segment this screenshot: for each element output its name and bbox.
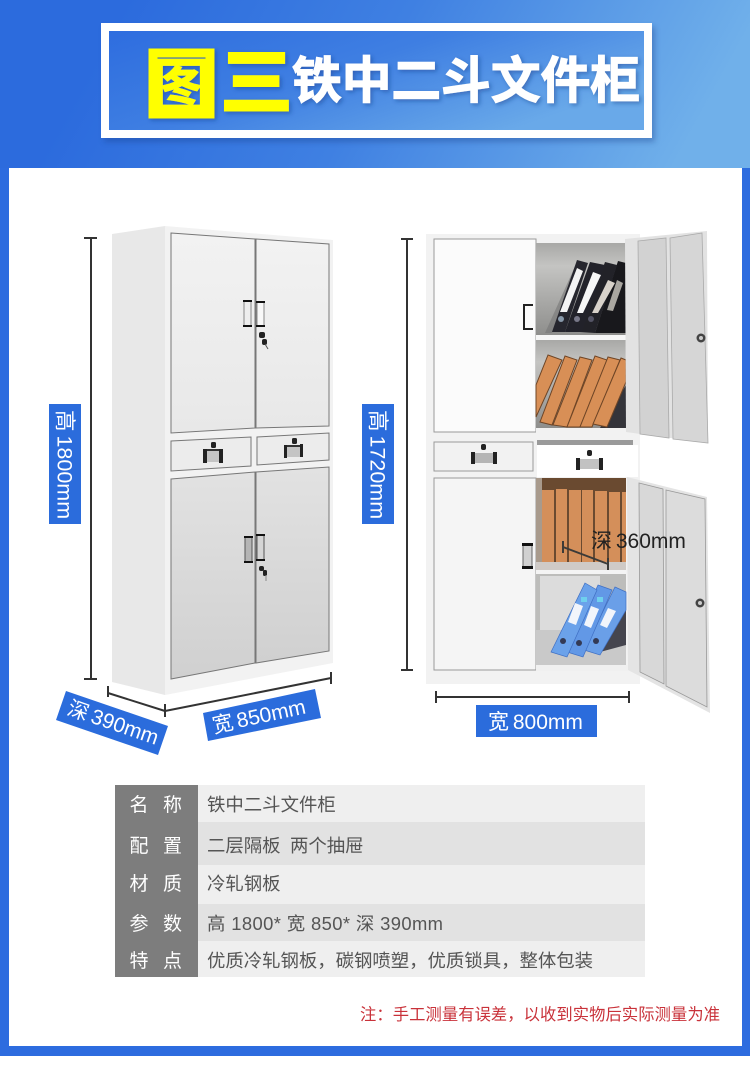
left drawer handle <box>471 444 497 464</box>
label column: 点 <box>163 950 182 972</box>
lower compartment <box>536 478 628 671</box>
upright orange boxes <box>542 489 626 562</box>
label column: 名 <box>130 794 149 816</box>
height badge 1800: 高 1800mm <box>52 410 76 519</box>
height dimension line 1720 <box>401 239 413 670</box>
label column: 配 <box>130 836 149 857</box>
label column: 称 <box>163 794 182 816</box>
lower lock and key <box>259 566 267 581</box>
upper open door <box>625 231 708 443</box>
depth badge 390: 深 390mm <box>64 697 162 750</box>
row values: 二层隔板 <box>207 835 281 856</box>
title: product name: 铁中二斗文件柜 <box>292 53 640 109</box>
upper door handle <box>524 305 533 329</box>
lower door handle <box>522 543 533 569</box>
row values: 高 1800* 宽 850* 深 390mm <box>207 913 443 934</box>
upper handles <box>243 300 265 327</box>
open drawer handle <box>576 450 603 470</box>
closed cabinet <box>112 226 333 695</box>
label column: 特 <box>130 950 149 972</box>
lower open door <box>627 477 710 713</box>
title banner <box>101 23 655 142</box>
height badge 1720 <box>362 404 394 524</box>
row values <box>207 794 593 971</box>
width dimension line 800 <box>436 691 629 703</box>
measurement note: 注：手工测量有误差，以收到实物后实际测量为准 <box>360 1006 720 1024</box>
white content panel <box>9 168 742 1046</box>
open cabinet <box>426 231 710 713</box>
left drawer handle <box>203 442 223 463</box>
label column: 数 <box>163 913 182 935</box>
title: figure number: 图 <box>151 54 212 121</box>
width badge 800 <box>476 705 597 737</box>
lower doors <box>171 467 329 679</box>
black binders <box>545 260 626 333</box>
upper lock and key <box>259 332 268 349</box>
cabinet side <box>112 226 165 695</box>
width dimension line <box>165 672 331 711</box>
cabinet front <box>165 226 333 695</box>
inner depth label: 深 360mm <box>591 530 686 553</box>
label column: 质 <box>163 873 182 895</box>
height dimension line 1800 <box>84 238 97 679</box>
open drawer <box>537 440 638 477</box>
specification table <box>115 785 645 977</box>
row values: 优质冷轧钢板，碳钢喷塑，优质锁具，整体包装 <box>207 950 593 971</box>
width badge 850: 宽 850mm <box>210 696 308 738</box>
upper door lock <box>696 334 706 342</box>
height badge 1800 <box>49 404 81 524</box>
row values: 铁中二斗文件柜 <box>207 794 336 815</box>
row values: 两个抽屉 <box>290 835 364 856</box>
label column: 材 <box>130 873 149 895</box>
orange file boxes <box>536 355 626 428</box>
inner depth line <box>563 541 608 570</box>
label column <box>115 785 198 977</box>
width badge 850 <box>203 689 321 741</box>
drawer fronts <box>171 433 329 471</box>
lower closed door <box>434 478 536 670</box>
upper compartment <box>536 243 626 434</box>
lower handles <box>244 534 265 563</box>
lower door lock <box>696 598 704 608</box>
row values: 冷轧钢板 <box>207 873 281 894</box>
label column: 参 <box>130 913 149 935</box>
width badge 800: 宽 800mm <box>488 711 583 734</box>
left drawer front <box>434 442 533 471</box>
row backgrounds <box>198 785 645 977</box>
title: figure number <box>151 44 292 124</box>
cabinet body <box>426 234 640 684</box>
label column: 置 <box>163 836 182 857</box>
height badge 1720: 高 1720mm <box>366 410 390 519</box>
title: figure number: 三 <box>221 44 292 124</box>
right drawer handle <box>284 438 303 458</box>
blue binders <box>551 583 626 657</box>
depth dimension line <box>108 686 165 717</box>
upper closed door <box>434 239 536 432</box>
upper doors <box>171 233 329 433</box>
